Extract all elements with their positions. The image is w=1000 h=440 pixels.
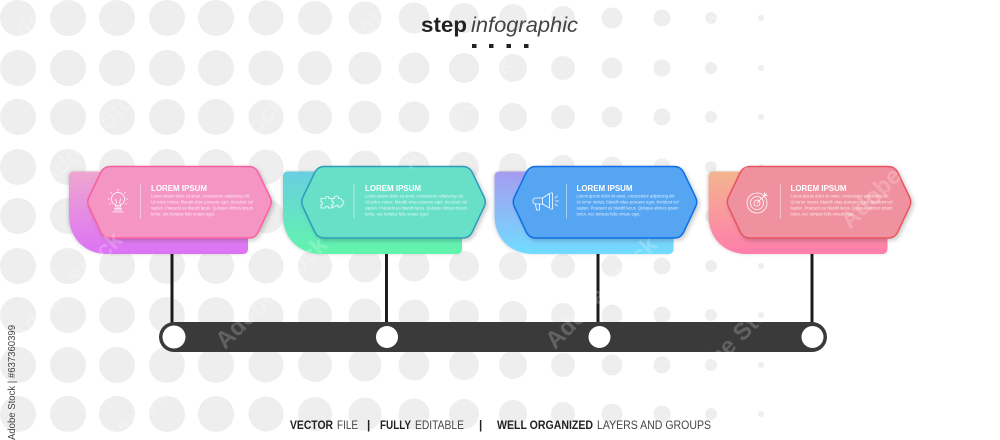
step 2: green card: LOREM IPSUM (365, 183, 421, 193)
icon: megaphone (533, 193, 558, 210)
timeline stems (172, 252, 812, 324)
step 3: blue card: Ut tortor metus, blandit vitae posuere eget, tincidunt vel (576, 200, 678, 204)
step 4: coral card: tortor, nec tempus felis ornare eget. (790, 212, 854, 216)
footer caption: FULLY (380, 419, 411, 432)
icon: light bulb (108, 190, 128, 212)
step 4: coral card: Lorem ipsum dolor sit amet, consectetur adipiscing elit. (790, 194, 890, 198)
step 4: coral card: sapien. Praesent eu blandit lacus. Quisque ultrices ipsum (790, 206, 893, 210)
title (421, 13, 578, 37)
title dots (472, 44, 528, 48)
footer caption: LAYERS AND GROUPS (597, 419, 711, 432)
icon: puzzle (321, 196, 344, 208)
step 1: pink card: tortor, nec tempus felis ornare eget. (151, 212, 215, 216)
footer caption: FILE (337, 419, 358, 432)
watermark: Adobe Stock (35, 69, 158, 192)
step 4: coral card: LOREM IPSUM (790, 183, 846, 193)
step 2: green card: sapien. Praesent eu blandit lacus. Quisque ultrices ipsum (365, 206, 467, 210)
title: step (421, 13, 467, 37)
step 2: green card: tortor, nec tempus felis ornare eget. (365, 212, 429, 216)
step 3: blue card (494, 166, 697, 254)
step 1: pink card (69, 166, 271, 254)
step 1: pink card: Ut tortor metus, blandit vitae posuere eget, tincidunt vel (151, 200, 253, 204)
footer caption (290, 419, 711, 432)
watermark: Adobe Stock (835, 111, 958, 234)
watermark: Adobe Stock (395, 51, 518, 174)
footer caption: VECTOR (290, 419, 334, 432)
step 4: coral card: Ut tortor metus, blandit vitae posuere eget, tincidunt vel (790, 200, 892, 204)
footer caption: WELL ORGANIZED (497, 419, 593, 432)
step 3: blue card: sapien. Praesent eu blandit lacus. Quisque ultrices ipsum (576, 206, 679, 210)
step 3: blue card: LOREM IPSUM (576, 183, 632, 193)
timeline bar with nodes (159, 322, 827, 352)
footer caption: EDITABLE (415, 419, 464, 432)
footer caption: | (479, 419, 482, 432)
step 1: pink card: LOREM IPSUM (151, 183, 207, 193)
step 1: pink card: sapien. Praesent eu blandit lacus. Quisque ultrices ipsum (151, 206, 253, 210)
step 2: green card: Ut tortor metus, blandit vitae posuere eget, tincidunt vel (365, 200, 467, 204)
step 4: coral card (708, 166, 911, 254)
title: infographic (471, 13, 578, 37)
step 1: pink card: Lorem ipsum dolor sit amet, consectetur adipiscing elit. (151, 194, 250, 198)
stock id side label: Adobe Stock | #637360399 (6, 325, 18, 440)
background dot pattern (0, 0, 764, 432)
step 2: green card: Lorem ipsum dolor sit amet, consectetur adipiscing elit. (365, 194, 464, 198)
watermark: Adobe Stock (210, 231, 333, 354)
watermark: Adobe Stock (540, 231, 663, 354)
watermark: Adobe Stock (5, 226, 128, 349)
icon: target (747, 192, 768, 213)
watermark: Adobe Stock (670, 281, 793, 404)
step 3: blue card: Lorem ipsum dolor sit amet, consectetur adipiscing elit. (576, 194, 676, 198)
watermark: Adobe (665, 0, 737, 70)
watermark: Adobe Stock (730, 51, 853, 174)
watermark: Adobe Stock (875, 246, 998, 369)
watermark: Stock (225, 90, 291, 156)
step 3: blue card: tortor, nec tempus felis ornare eget. (576, 212, 640, 216)
step 2: green card (283, 166, 485, 254)
footer caption: | (367, 419, 370, 432)
